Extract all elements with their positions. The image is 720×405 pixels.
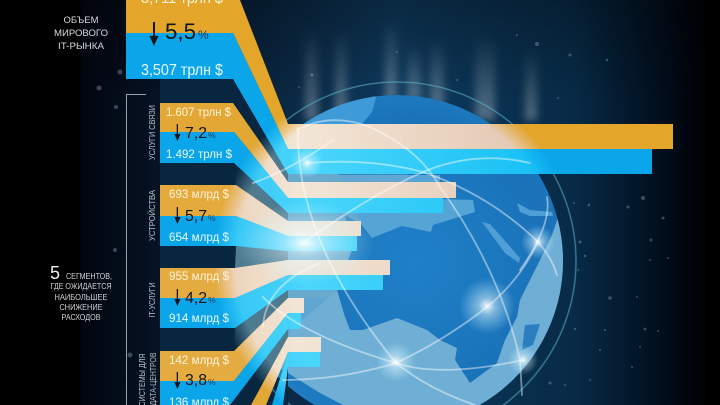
total market change: 5,5 xyxy=(165,19,196,44)
segment values: 1.492 трлн $ xyxy=(166,149,233,161)
vertical segment labels xyxy=(137,105,158,405)
segment change: data centers: % xyxy=(208,377,216,387)
vertical segment labels: ДАТА-ЦЕНТРОВ xyxy=(148,352,158,405)
segment change: telecom: 7,2 xyxy=(185,125,207,142)
segment values xyxy=(166,107,233,405)
total market values: 3,507 трлн $ xyxy=(141,62,223,79)
network arcs xyxy=(253,120,557,405)
panel heading: world IT market: МИРОВОГО xyxy=(54,28,108,39)
segments caption: ГДЕ ОЖИДАЕТСЯ xyxy=(50,281,112,291)
starfield xyxy=(96,34,669,386)
segment change: devices xyxy=(174,207,216,225)
total market change xyxy=(150,19,209,46)
segment change: data centers xyxy=(174,372,216,389)
segments caption: СНИЖЕНИЕ xyxy=(60,302,103,312)
segments caption xyxy=(50,263,112,322)
cyan overlay of blue bands over globe xyxy=(218,126,550,401)
top lighter sea xyxy=(304,96,376,124)
fifth segment bars xyxy=(251,337,321,405)
peach overlay of orange bands over globe xyxy=(214,117,541,393)
faint bar shadows on globe xyxy=(288,174,408,298)
continent: western land mass xyxy=(281,174,352,370)
segment: telecom services bands xyxy=(160,103,456,213)
network nodes xyxy=(291,147,555,382)
total market bands xyxy=(126,0,673,174)
vertical segment labels: УСТРОЙСТВА xyxy=(146,190,157,241)
segment: data center systems bands xyxy=(160,298,304,405)
central glow xyxy=(235,201,375,285)
segment change: IT services: 4,2 xyxy=(185,290,207,307)
vertical segment labels: СИСТЕМЫ ДЛЯ xyxy=(137,354,147,405)
segment change: data centers: 3,8 xyxy=(185,372,207,389)
segment values: 914 млрд $ xyxy=(169,313,230,325)
segment change: devices: % xyxy=(208,213,216,223)
globe atmosphere ring xyxy=(218,82,576,405)
segment change: devices: 5,7 xyxy=(185,208,207,225)
panel heading: world IT market: ОБЪЕМ xyxy=(64,15,99,26)
panel heading: world IT market: IT-РЫНКА xyxy=(58,41,105,52)
total market 2015 orange band and bar xyxy=(126,0,673,149)
light beams above globe xyxy=(305,20,537,120)
segment values: 142 млрд $ xyxy=(169,355,230,367)
lightened gaps over globe xyxy=(234,136,288,383)
total market values xyxy=(141,0,223,79)
segment: devices bands xyxy=(160,185,361,251)
panel heading: world IT market xyxy=(54,15,108,52)
segments bracket xyxy=(126,94,146,405)
segment values: 654 млрд $ xyxy=(169,232,230,244)
vertical segment labels: УСЛУГИ СВЯЗИ xyxy=(147,105,157,160)
segment: IT services bands xyxy=(160,260,390,328)
segment values: 955 млрд $ xyxy=(169,271,230,283)
continent: northern land mass xyxy=(340,175,475,238)
vertical segment labels: IT-УСЛУГИ xyxy=(147,282,157,318)
segment values: 693 млрд $ xyxy=(169,189,230,201)
total market change: % xyxy=(198,28,209,42)
segment change: IT services: % xyxy=(208,295,216,305)
segments caption: 5 xyxy=(50,263,60,283)
segment change: IT services xyxy=(174,289,216,307)
globe with continents xyxy=(231,90,585,405)
segments caption: НАИБОЛЬШЕЕ xyxy=(54,292,108,302)
segments caption: СЕГМЕНТОВ, xyxy=(66,271,112,281)
dark gap bands between segments xyxy=(160,79,288,405)
segment values: 1.607 трлн $ xyxy=(166,107,232,119)
total market 2016 blue band and bar xyxy=(126,33,652,174)
segment change: telecom xyxy=(174,124,216,142)
segments caption: РАСХОДОВ xyxy=(62,312,101,322)
segment change: telecom: % xyxy=(208,130,216,140)
islands xyxy=(482,203,553,263)
continent: southern land mass xyxy=(284,219,563,405)
